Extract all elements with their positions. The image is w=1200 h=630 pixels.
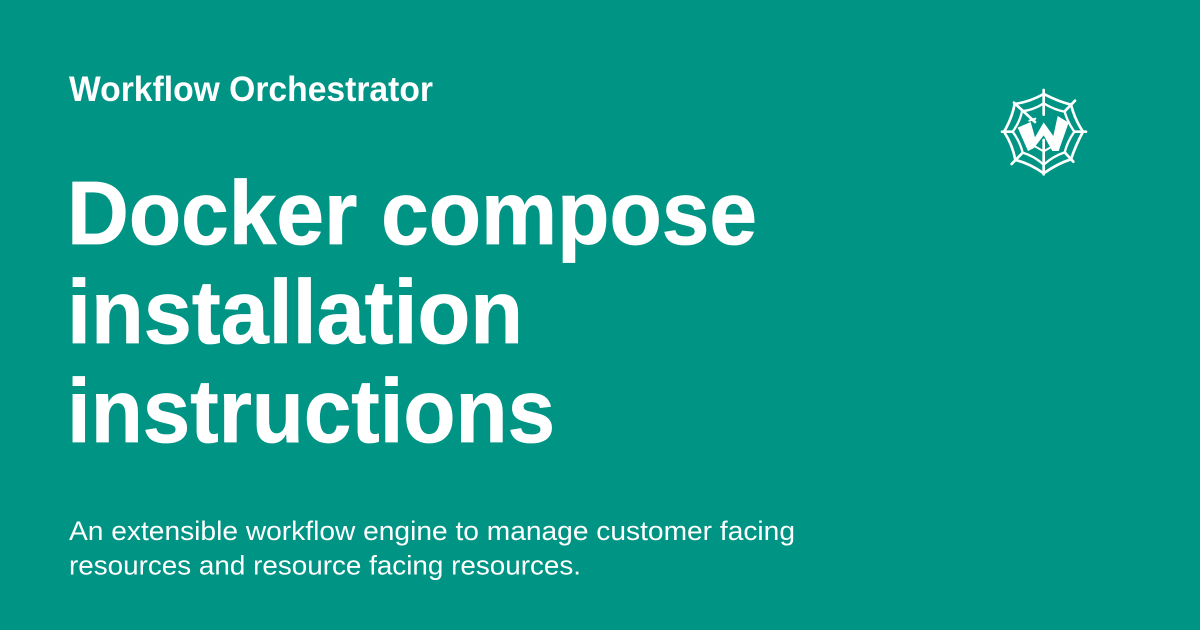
- icon: outer web ring: [1004, 94, 1083, 173]
- description: An extensible workflow engine to manage customer facing: [69, 516, 795, 546]
- page title: [67, 164, 757, 462]
- icon: small web strands: [1029, 119, 1052, 151]
- description: [69, 516, 795, 580]
- icon: spider web logo: [1002, 90, 1086, 174]
- site name heading: Workflow Orchestrator: [69, 70, 433, 109]
- icon: letter W: [1018, 116, 1069, 151]
- page title: installation: [67, 263, 523, 363]
- page title: instructions: [67, 362, 555, 462]
- icon: inner web ring: [1013, 103, 1074, 165]
- icon: web spokes: [1002, 90, 1086, 174]
- page title: Docker compose: [67, 164, 757, 264]
- description: resources and resource facing resources.: [69, 550, 581, 580]
